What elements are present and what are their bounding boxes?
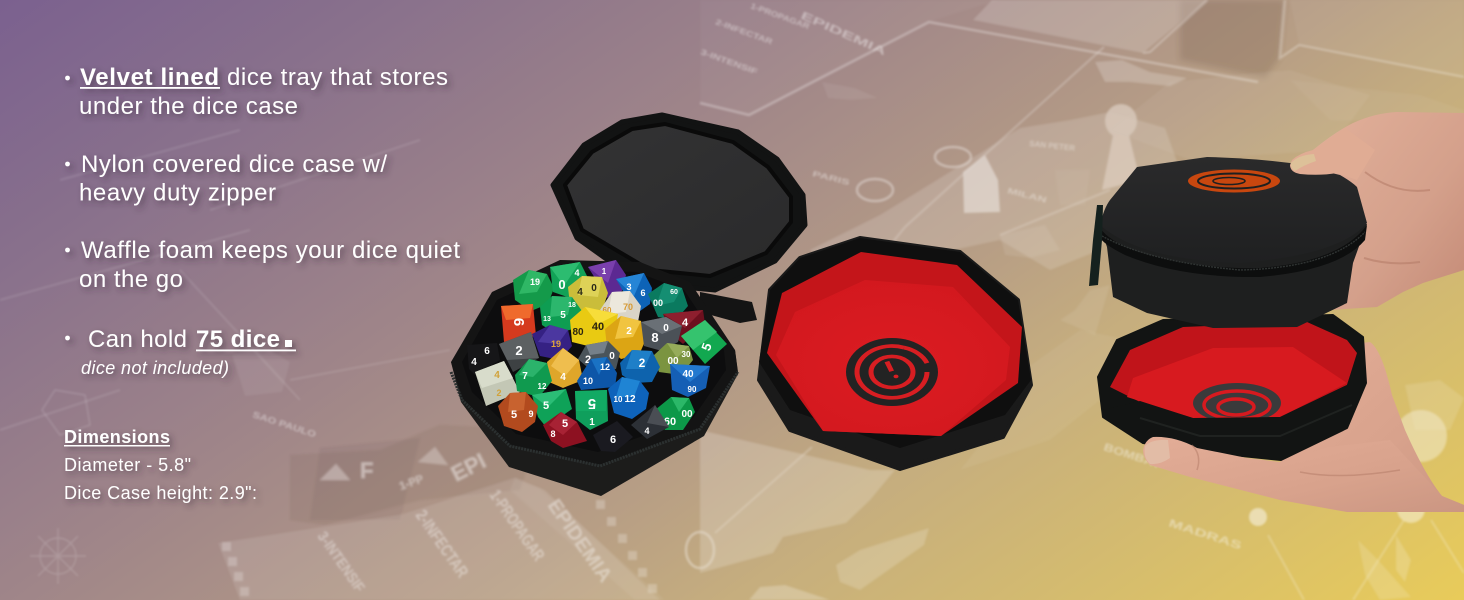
dice pile: 0 bbox=[663, 323, 669, 334]
dice pile: 8 bbox=[651, 330, 659, 345]
product: open dice case lid with foam bbox=[553, 115, 805, 323]
background card lettering: MILAN bbox=[1007, 186, 1048, 205]
dice pile: 2 bbox=[515, 343, 523, 358]
dice pile: 13 bbox=[543, 316, 551, 323]
dice pile: 5 bbox=[543, 400, 549, 412]
dice pile: 4 bbox=[577, 287, 583, 298]
background card lettering: 1-PP bbox=[398, 473, 425, 493]
bullet: nylon case: heavy duty zipper bbox=[79, 180, 276, 206]
dice pile: 4 bbox=[494, 370, 500, 381]
bullet: 75 dice: Can hold bbox=[88, 326, 187, 353]
bullet: waffle foam bbox=[65, 237, 460, 293]
zipper band bbox=[1100, 225, 1367, 277]
background card lettering: 1-PROPAGAR bbox=[486, 486, 548, 564]
top card outline bbox=[700, 0, 1000, 115]
dice pile: 18 bbox=[568, 302, 576, 309]
background card lettering: BOMBAY bbox=[1102, 441, 1164, 472]
red velvet floor bbox=[776, 280, 1010, 436]
map node circles bbox=[686, 147, 971, 568]
dice pile: 80 bbox=[572, 327, 584, 338]
dice pile: 4 bbox=[644, 426, 650, 436]
faint emblem lower left bbox=[30, 390, 90, 584]
logo on tray floor bbox=[846, 338, 938, 406]
dice pile: 12 bbox=[600, 362, 610, 372]
dice pile: 1 bbox=[602, 267, 607, 276]
dice pile: 40 bbox=[682, 369, 694, 380]
dice pile: 00 bbox=[681, 409, 693, 420]
bullet: velvet lined: dice tray that stores bbox=[227, 64, 448, 91]
pale cube and pawn tokens bbox=[963, 155, 1000, 213]
background card lettering: SAO PAULO bbox=[251, 409, 317, 439]
dice pile: 10 bbox=[583, 376, 593, 386]
bullet: 75 dice bbox=[65, 326, 296, 353]
top right darker card area bbox=[1180, 0, 1285, 78]
background card lettering: 2-INFECTAR bbox=[412, 506, 472, 581]
background card lettering: 3-INTENSIF bbox=[699, 47, 759, 76]
film strip squares bbox=[222, 500, 657, 596]
dice pile: 5 bbox=[560, 310, 566, 321]
tray logo bbox=[1193, 383, 1281, 423]
red velvet walls bbox=[767, 252, 1022, 436]
background card lettering: SAN PETER bbox=[1029, 139, 1076, 153]
product: closed dice case in hand bbox=[1089, 157, 1367, 328]
dice pile: 00 bbox=[653, 298, 663, 308]
dimensions block: Dimensions bbox=[64, 427, 170, 447]
dice pile: 00 bbox=[667, 356, 679, 367]
dice pile: 5 bbox=[588, 395, 596, 412]
dice pile: 10 bbox=[614, 395, 623, 404]
dice pile: 8 bbox=[550, 429, 556, 439]
dice pile: 70 bbox=[623, 302, 633, 312]
tray red interior bbox=[1110, 322, 1357, 418]
product: hand behind the case and palm under the tray bbox=[1280, 112, 1464, 512]
dice pile: 4 bbox=[574, 268, 580, 278]
dice pile: 6 bbox=[610, 434, 616, 446]
dice pile: 4 bbox=[471, 357, 477, 368]
dice pile: 5 bbox=[511, 409, 517, 421]
dimensions block bbox=[64, 427, 257, 503]
bullet list text bbox=[64, 64, 460, 503]
background card lettering: 2-INFECTAR bbox=[714, 17, 774, 46]
dice pile: 6 bbox=[640, 288, 646, 298]
dice pile bbox=[467, 260, 727, 452]
zipper pull bbox=[1089, 205, 1103, 286]
dice pile: 19 bbox=[551, 339, 561, 349]
dice pile: 12 bbox=[538, 382, 547, 391]
dice pile: 9 bbox=[528, 409, 534, 419]
background card lettering: EPIDEMIA bbox=[543, 495, 616, 587]
bullet: velvet lined: under the dice case bbox=[79, 93, 298, 120]
case top lid bbox=[1100, 157, 1367, 263]
dimensions block: Diameter - 5.8" bbox=[64, 455, 191, 475]
dice pile: 6 bbox=[484, 346, 490, 357]
dice pile: 30 bbox=[682, 350, 691, 359]
dice pile: 19 bbox=[530, 277, 540, 287]
product: dice case filled with dice bbox=[451, 260, 738, 496]
top keyboard like card bbox=[973, 0, 1207, 53]
top right board edge bbox=[1280, 0, 1464, 77]
creases of upper hand bbox=[1364, 172, 1430, 263]
bullet: 75 dice: 75 dice bbox=[196, 326, 280, 353]
case lower body bbox=[1100, 224, 1367, 328]
dark warning cards bbox=[290, 425, 540, 525]
dice pile: 12 bbox=[624, 394, 636, 405]
dice pile: 2 bbox=[496, 388, 502, 398]
background card lettering: EPIDEMIA bbox=[799, 10, 888, 58]
dice pile: 60 bbox=[603, 306, 612, 315]
bullet: waffle foam: Waffle foam keeps your dice quiet bbox=[81, 237, 460, 264]
dice pile: 7 bbox=[522, 371, 528, 382]
dice pile: 90 bbox=[688, 385, 697, 394]
dice pile: 60 bbox=[664, 416, 676, 428]
dice pile: 5 bbox=[698, 341, 715, 353]
dice pile: 60 bbox=[670, 289, 678, 296]
orange logo on lid bbox=[1188, 170, 1280, 192]
tray front rim bbox=[1103, 352, 1366, 460]
upper hand bbox=[1313, 112, 1464, 310]
dice pile: 0 bbox=[609, 351, 615, 362]
dice pile: 6 bbox=[510, 318, 527, 326]
dice pile: 2 bbox=[626, 326, 632, 337]
product: tray held in lower hand bbox=[1098, 315, 1366, 460]
land masses bbox=[700, 60, 1464, 600]
note: dice not included: dice not included) bbox=[81, 358, 229, 378]
product: open red velvet dice tray bbox=[759, 238, 1031, 469]
background card lettering: MADRAS bbox=[1167, 517, 1243, 552]
dimensions block: Dice Case height: 2.9": bbox=[64, 483, 257, 503]
route lines bbox=[715, 47, 1464, 600]
dice pile: 2 bbox=[585, 354, 591, 366]
lower hand palm bbox=[1280, 342, 1464, 512]
background card lettering: 1-PROPAGAR bbox=[749, 1, 811, 31]
dice pile: 0 bbox=[591, 283, 597, 294]
bullet: nylon case bbox=[65, 151, 387, 206]
bullet: velvet lined bbox=[65, 64, 448, 120]
dice pile: 1 bbox=[589, 417, 595, 428]
dice pile: 4 bbox=[682, 317, 689, 329]
dice pile: 40 bbox=[592, 321, 604, 333]
product: fingertip resting on case lid bbox=[1290, 128, 1375, 180]
dice pile: 3 bbox=[626, 282, 632, 292]
epidemia cards bbox=[218, 478, 660, 600]
dice pile: 5 bbox=[562, 418, 568, 430]
bullet: velvet lined: Velvet lined bbox=[80, 64, 219, 91]
bullet: nylon case: Nylon covered dice case w/ bbox=[81, 151, 387, 178]
dice pile: 0 bbox=[558, 277, 566, 292]
background card lettering: PARIS bbox=[812, 169, 852, 187]
bullet: waffle foam: on the go bbox=[79, 266, 183, 293]
dice pile: 2 bbox=[639, 356, 646, 370]
background card lettering: EPI bbox=[447, 448, 490, 486]
dice pile: 4 bbox=[560, 372, 566, 383]
background card lettering: F bbox=[360, 458, 373, 483]
background card lettering bbox=[251, 1, 1243, 596]
product: thumb and palm in front of tray bbox=[1143, 437, 1464, 512]
